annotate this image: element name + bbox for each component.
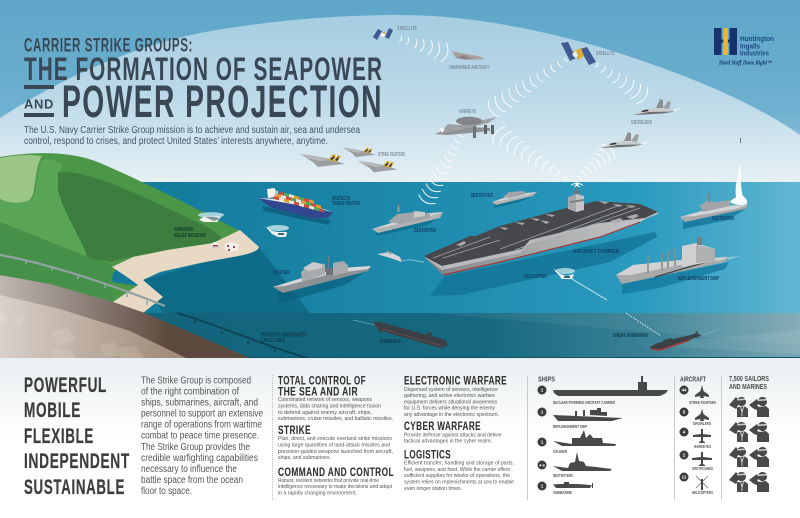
- attributes word list: MOBILE: [24, 399, 81, 422]
- hill lower band: [0, 222, 113, 302]
- underwater band: [0, 313, 800, 358]
- roster: submarine: 1: [541, 484, 544, 489]
- electronic warfare: [404, 376, 507, 418]
- helicopter with sonar line: [553, 268, 607, 300]
- label: helicopter: HELICOPTER: [524, 274, 547, 280]
- label: satellite two: SATELLITE: [596, 51, 615, 57]
- electronic warfare: equipment delivers situational awareness: [404, 399, 497, 405]
- strike: STRIKE: [278, 425, 311, 437]
- capabilities column two: [404, 376, 514, 492]
- hill dark contour: [58, 172, 222, 262]
- electronic warfare: any advantage in the electronic spectrum.: [404, 412, 499, 418]
- kicker heading: CARRIER STRIKE GROUPS:: [24, 36, 193, 56]
- replenishment ship: [616, 237, 740, 294]
- strike: using large quantities of land-attack missiles and: [278, 442, 390, 448]
- roster: greyhounds: [680, 450, 713, 471]
- seabed light layer: [0, 295, 186, 358]
- label: protects underwater cable lines: CABLE LINES: [261, 338, 285, 344]
- roster: replenishment ship: 1: [541, 410, 544, 415]
- roster: helicopters: [680, 472, 713, 495]
- logistics: sufficient supplies for weeks of operations, the: [404, 473, 510, 479]
- underwater cable line: [177, 313, 307, 358]
- label: hawkeye: HAWKEYE: [459, 109, 476, 115]
- attributes word list: FLEXIBLE: [24, 425, 94, 448]
- container ship: [258, 188, 333, 225]
- roster: growlers: [680, 408, 711, 426]
- strike group description: necessary to influence the: [141, 464, 237, 475]
- strike group description: of the right combination of: [141, 386, 239, 398]
- roster: hawkeyes: [680, 428, 711, 449]
- roster: growlers: 5: [683, 410, 686, 415]
- label: destroyer A: DESTROYER: [414, 228, 436, 234]
- mission statement: control, respond to crises, and protect United States’ interests anywhere, anytime.: [24, 136, 328, 147]
- strike group description: The Strike Group is composed: [141, 376, 251, 386]
- electronic warfare: ELECTRONIC WARFARE: [404, 376, 507, 388]
- coastal pipeline: [0, 255, 165, 306]
- strike: [278, 425, 393, 461]
- carrier island: [568, 194, 584, 212]
- roster: growlers: GROWLERS: [693, 421, 711, 426]
- electronic warfare: for U.S. forces while denying the enemy: [404, 406, 495, 412]
- command and control: [278, 467, 394, 496]
- aircraft heading: AIRCRAFT: [680, 374, 706, 384]
- roster: cruiser: CRUISER: [553, 449, 567, 454]
- sailors and marines: [729, 374, 769, 492]
- strike group description: floor to space.: [141, 486, 192, 497]
- logistics: Efficient transfer, handling and storage of parts,: [404, 460, 514, 466]
- ships roster: [538, 374, 668, 495]
- strike fighter three: [358, 161, 398, 172]
- logistics: [404, 450, 514, 492]
- strike: ships, and submarines.: [278, 455, 331, 461]
- label: growlers: GROWLERS: [631, 120, 652, 126]
- sailors heading: AND MARINES: [729, 382, 767, 391]
- logo: Huntington Ingalls Industries: Ingalls: [740, 42, 760, 50]
- total control of the sea and air: submarines, cruise missiles, and ballistic missiles.: [278, 416, 393, 422]
- label: destroyer B: DESTROYER: [471, 193, 493, 199]
- label: enemy submarine: ENEMY SUBMARINE: [613, 333, 648, 339]
- roster: greyhounds: 2: [683, 453, 686, 458]
- carrier deck markings: [433, 205, 640, 258]
- strike group description: [141, 376, 263, 497]
- and lockup: AND: [24, 98, 54, 112]
- sea surface: [0, 182, 800, 313]
- seabed rocks: [0, 310, 144, 358]
- destroyer B: [492, 191, 537, 208]
- strike group description: battle space from the ocean: [141, 475, 243, 486]
- command and control: COMMAND AND CONTROL: [278, 467, 394, 479]
- total control of the sea and air: TOTAL CONTROL OF: [278, 376, 366, 388]
- helicopter near coast: [265, 225, 289, 237]
- label: cruiser: CRUISER: [273, 270, 290, 276]
- roster: carrier: NUCLEAR-POWERED AIRCRAFT CARRIER: [553, 400, 615, 405]
- strike group description: combat to peace time presence.: [141, 430, 259, 442]
- seabed dark layer: [0, 275, 250, 358]
- roster: greyhounds: GREYHOUNDS: [692, 466, 713, 471]
- label: submarine: SUBMARINE: [380, 339, 401, 345]
- logistics: even longer station times.: [404, 486, 462, 492]
- strike: precision-guided weapons launched from aircraft,: [278, 449, 393, 455]
- sailors heading: [729, 374, 769, 391]
- hill light patch: [0, 155, 42, 203]
- roster: cruiser: [538, 430, 616, 454]
- label: satellite one: SATELLITE: [397, 26, 417, 32]
- title block: [24, 36, 383, 147]
- electronic warfare: gathering, and active electronic warfare: [404, 393, 495, 399]
- total control of the sea and air: systems, data sharing and intelligence fusion: [278, 403, 381, 409]
- hawkeye aircraft: [435, 117, 497, 138]
- attributes word list: INDEPENDENT: [24, 450, 130, 473]
- roster: submarine: SUBMARINE: [553, 490, 572, 495]
- roster: hawkeyes: HAWKEYES: [694, 444, 711, 449]
- cyber warfare: [404, 421, 502, 445]
- strike group description: ships, submarines, aircraft, and: [141, 398, 258, 408]
- cyber warfare: CYBER WARFARE: [404, 421, 481, 433]
- roster: destroyers: 4-6: [539, 463, 546, 468]
- roster: helicopters: HELICOPTERS: [692, 490, 713, 495]
- command and control: intelligence necessary to make decisions and adapt: [278, 484, 392, 490]
- aircraft roster: [680, 374, 716, 495]
- bottom info panel: [0, 358, 800, 518]
- cyber warfare: tactical advantages in the cyber realm.: [404, 439, 492, 445]
- logo: Huntington Ingalls Industries: Huntington: [740, 34, 774, 43]
- cruiser: [273, 255, 371, 304]
- attributes word list: POWERFUL: [24, 374, 107, 397]
- logo: Huntington Ingalls Industries: Industries: [740, 48, 769, 58]
- label: protects trade routes: PROTECTS: [332, 196, 350, 202]
- label: humanitarian relief missions: HUMANITARIAN: [174, 227, 193, 233]
- label: protects underwater cable lines: PROTECTS UNDERWATER: [261, 332, 307, 338]
- strike fighter two: [343, 148, 375, 157]
- satellite one: [373, 28, 393, 40]
- logo: Huntington Ingalls Industries: [714, 28, 774, 66]
- strike fighter one: [300, 154, 345, 167]
- sailors heading: 7,500 SAILORS: [729, 374, 769, 383]
- roster: hawkeyes: 4: [683, 430, 686, 435]
- jet flying low: [377, 250, 424, 262]
- enemy submarine: [626, 313, 720, 350]
- logistics: system relies on replenishments at sea to enable: [404, 480, 514, 486]
- label: humanitarian relief missions: RELIEF MISSIONS: [174, 233, 206, 239]
- roster: destroyers: DESTROYERS: [553, 473, 573, 478]
- seabed fade: [0, 275, 250, 358]
- carrier flight deck: [424, 201, 658, 266]
- label: humanitarian relief missions: [174, 227, 206, 239]
- strike group description: personnel to support an extensive: [141, 408, 263, 420]
- aircraft carrier: [424, 182, 658, 296]
- mission statement: The U.S. Navy Carrier Strike Group mission is to achieve and sustain air, sea and undersea: [24, 125, 360, 136]
- label: unmanned aircraft: UNMANNED AIRCRAFT: [449, 65, 490, 71]
- beach: [112, 230, 259, 313]
- cyber warfare: Provide defense against attacks and deliver: [404, 432, 502, 438]
- hill mid contour: [0, 159, 87, 256]
- roster: strike fighters: 44: [681, 388, 687, 393]
- destroyer C with missile launch: [680, 138, 748, 229]
- saluting figures: [729, 397, 769, 492]
- parked aircraft on deck: [456, 201, 639, 246]
- electronic warfare: Dispersed system of sensors, intelligence: [404, 387, 498, 393]
- logistics: fuel, weapons, and food. While the carrier offers: [404, 467, 510, 473]
- humanitarian helicopter: [198, 212, 224, 222]
- main heading line one: THE FORMATION OF SEAPOWER: [24, 51, 383, 87]
- and lockup: [24, 85, 54, 117]
- signal arcs: [399, 36, 651, 207]
- land: hill and seabed: [0, 153, 259, 358]
- roster: replenishment ship: REPLENISHMENT SHIP: [553, 424, 587, 429]
- attributes word list: SUSTAINABLE: [24, 476, 125, 499]
- roster: submarine: [538, 482, 593, 495]
- label: strike fighters: STRIKE FIGHTERS: [378, 152, 405, 158]
- capabilities column one: [278, 376, 394, 496]
- missile plume: [730, 162, 747, 205]
- strike group description: range of operations from wartime: [141, 420, 262, 430]
- carrier shadow: [430, 232, 657, 296]
- label: protects trade routes: TRADE ROUTES: [332, 201, 360, 207]
- roster: carrier: [538, 376, 668, 405]
- friendly submarine: [353, 320, 448, 348]
- destroyer A: [372, 204, 443, 236]
- sky background: [0, 0, 800, 182]
- total control of the sea and air: to defend against enemy aircraft, ships,: [278, 410, 372, 416]
- ships heading: SHIPS: [538, 374, 555, 384]
- sky dome: [0, 15, 800, 182]
- unmanned aircraft: [452, 51, 485, 60]
- label: protects underwater cable lines: [261, 332, 307, 344]
- command and control: Robust, resilient networks that provide real-time: [278, 478, 379, 484]
- command and control: in a rapidly changing environment.: [278, 490, 357, 496]
- roster: strike fighters: [680, 385, 716, 405]
- total control of the sea and air: [278, 376, 393, 422]
- roster: cruiser: 1: [541, 440, 544, 445]
- main heading line two: POWER PROJECTION: [62, 76, 383, 127]
- label: destroyer C: DESTROYER: [712, 216, 734, 222]
- label: aircraft carrier: AIRCRAFT CARRIER: [573, 249, 619, 255]
- strike: Plan, direct, and execute overland strike missions: [278, 436, 392, 442]
- attributes word list: [24, 374, 130, 499]
- carrier hull: [424, 212, 658, 275]
- label: protects trade routes: [332, 196, 360, 207]
- growler lower: [601, 132, 651, 148]
- mission statement: [24, 125, 360, 147]
- roster: replenishment ship: [538, 408, 623, 429]
- roster: destroyers: [538, 452, 612, 478]
- label: replenishment ship: REPLENISHMENT SHIP: [678, 276, 719, 282]
- total control of the sea and air: THE SEA AND AIR: [278, 386, 358, 398]
- strike group description: credible warfighting capabilities: [141, 453, 258, 464]
- strike group description: The Strike Group provides the: [141, 442, 250, 453]
- roster: strike fighters: STRIKE FIGHTERS: [689, 400, 716, 405]
- shore shadow on water: [143, 247, 310, 313]
- logistics: LOGISTICS: [404, 450, 451, 462]
- roster: carrier: 1: [541, 388, 544, 393]
- satellite two: [561, 42, 596, 65]
- total control of the sea and air: Coordinated network of sensors, weapons: [278, 397, 372, 403]
- roster: helicopters: 11: [682, 475, 687, 480]
- hill: [0, 153, 241, 303]
- logo: Huntington Ingalls Industries: Hard Stuff Done Right™: [718, 60, 772, 66]
- growler upper: [633, 99, 683, 115]
- relief supply crates: [211, 242, 238, 252]
